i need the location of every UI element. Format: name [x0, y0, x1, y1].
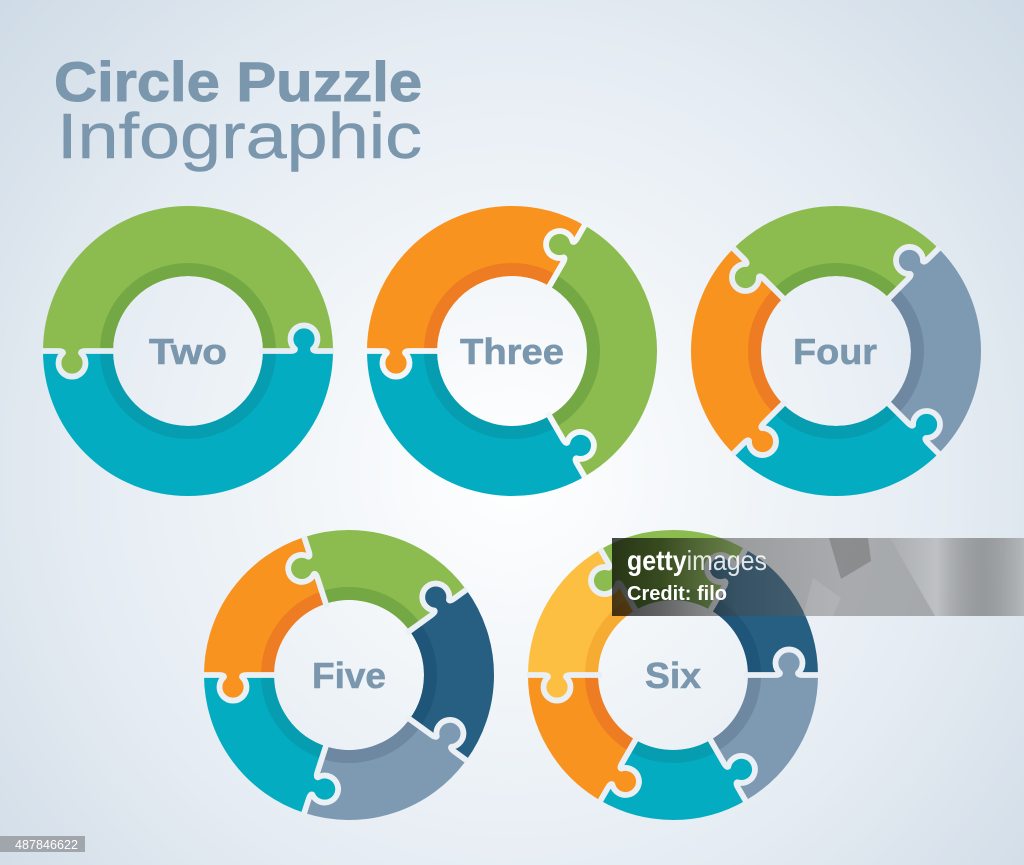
piece: green — [78, 241, 298, 461]
piece: navy — [195, 521, 503, 829]
puzzle tab: yellow — [527, 674, 602, 701]
puzzle tab: green — [715, 247, 787, 319]
puzzle circle: Four — [680, 195, 992, 507]
label: Four: Four — [793, 331, 877, 372]
title — [54, 50, 422, 172]
puzzle tab: green — [42, 350, 117, 377]
puzzle tab: grey — [744, 649, 819, 676]
puzzle tab: teal — [708, 724, 768, 802]
label: Two: Two — [149, 331, 227, 372]
watermark credit text: Credit: filo — [627, 583, 727, 605]
piece: green — [680, 195, 992, 507]
piece: teal — [523, 525, 823, 825]
piece: orange — [523, 525, 823, 825]
title line: Infographic: Infographic — [57, 100, 422, 172]
puzzle circle: Two — [42, 241, 334, 461]
puzzle tab: grey — [868, 230, 940, 302]
puzzle tab: green — [280, 536, 328, 615]
piece: grey — [195, 521, 503, 829]
puzzle tab: green — [525, 212, 586, 290]
image id tag — [0, 836, 85, 852]
puzzle tab: orange — [732, 400, 804, 472]
puzzle circle: Six — [523, 525, 823, 825]
piece: grey — [563, 565, 783, 785]
piece: grey — [680, 195, 992, 507]
puzzle tab: orange — [203, 674, 278, 701]
puzzle circle: Five — [195, 521, 503, 829]
image id tag: 487846622 — [15, 838, 78, 852]
piece: teal — [78, 241, 298, 461]
puzzle tab: green — [578, 548, 638, 626]
puzzle tab: teal — [259, 325, 334, 352]
puzzle tab: navy — [391, 569, 468, 634]
piece: green — [210, 536, 488, 814]
title line: Circle Puzzle: Circle Puzzle — [54, 50, 422, 113]
watermark logo text: gettyimages — [627, 545, 767, 576]
label: Six: Six — [645, 655, 701, 696]
label: Five: Five — [312, 655, 386, 696]
puzzle tab: navy — [686, 536, 747, 614]
piece: orange — [402, 241, 622, 461]
puzzle tab: grey — [406, 696, 482, 762]
piece: teal — [362, 201, 662, 501]
label: Three: Three — [460, 331, 564, 372]
piece: navy — [523, 525, 823, 825]
piece: green — [362, 201, 662, 501]
piece: orange — [680, 195, 992, 507]
puzzle tab: orange — [599, 736, 660, 814]
puzzle tab: teal — [547, 400, 607, 478]
puzzle tab: teal — [303, 742, 351, 822]
piece: orange — [239, 565, 459, 785]
watermark banner — [612, 538, 1024, 616]
puzzle tab: orange — [366, 350, 441, 377]
puzzle tab: teal — [885, 383, 957, 455]
piece: teal — [210, 536, 488, 814]
piece: yellow — [563, 565, 783, 785]
puzzle circle: Three — [362, 201, 662, 501]
piece: teal — [680, 195, 992, 507]
piece: green — [523, 525, 823, 825]
